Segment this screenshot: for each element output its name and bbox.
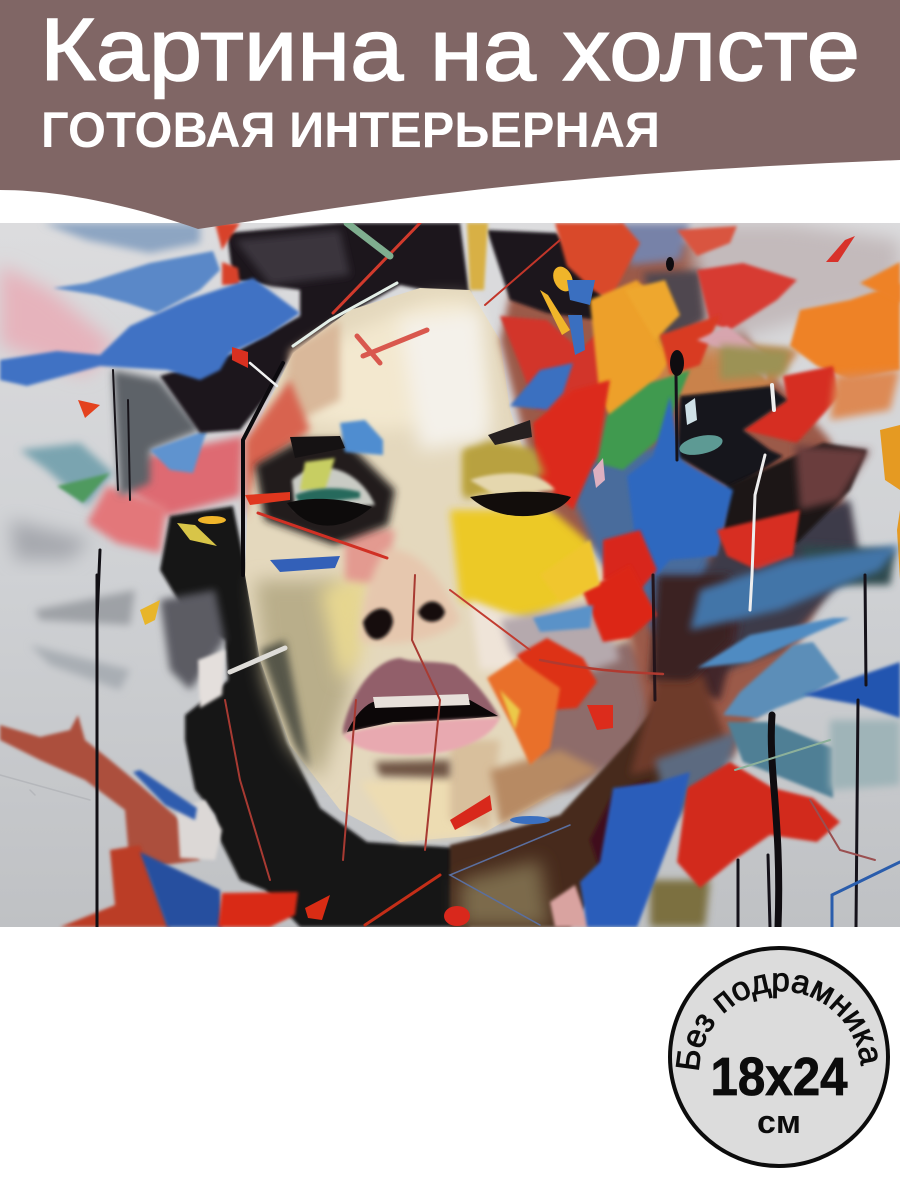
painting: paint dabs — [140, 236, 855, 926]
header banner — [0, 0, 900, 229]
painting: base tones behind right paint — [500, 240, 860, 760]
painting: lower right paint — [487, 545, 900, 927]
painting: drips and thin lines — [0, 223, 900, 927]
badge unit: см — [757, 1104, 801, 1140]
painting: colored paint on right — [467, 223, 900, 642]
painting: dark hair — [160, 223, 470, 927]
badge size: 18x24 — [710, 1047, 848, 1107]
painting: blue strokes top left — [0, 251, 300, 386]
painting: face skin — [245, 288, 660, 842]
painting: lips — [343, 658, 500, 755]
title: Картина на холсте — [40, 0, 860, 99]
subtitle: ГОТОВАЯ ИНТЕРЬЕРНАЯ — [41, 102, 660, 158]
painting: left eye — [255, 420, 395, 545]
badge curved label: Без подрамника — [676, 972, 878, 1070]
painting: abstract paint-splash portrait — [0, 223, 900, 927]
painting: right eye — [465, 420, 571, 516]
painting: neck and shadows — [450, 575, 740, 927]
painting: left red-brown stroke and lower paint — [0, 400, 330, 927]
painting: nose — [360, 549, 460, 644]
painting: left background smears — [0, 223, 243, 690]
badge: size without stretcher frame — [668, 946, 890, 1168]
